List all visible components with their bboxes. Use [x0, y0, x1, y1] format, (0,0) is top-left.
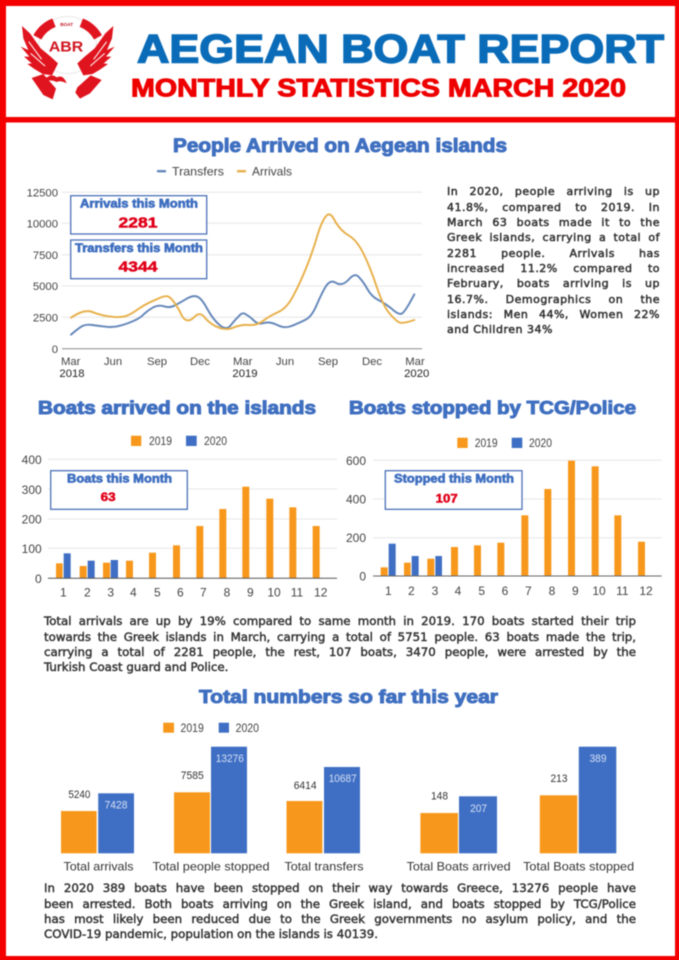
line chart legend: Arrivals [252, 164, 292, 178]
bar chart: boats arrived: 100 [22, 542, 42, 556]
text block: island summary: February, boats arriving is up [447, 277, 660, 290]
text block: boats summary: Turkish Coast guard and Police. [44, 660, 228, 674]
text block: island summary [446, 185, 661, 336]
line chart: transfers and arrivals: Mar [405, 356, 425, 368]
callout: boats this month: 63 [101, 490, 116, 504]
title: AEGEAN BOAT REPORT [137, 28, 664, 72]
bar chart: boats arrived [22, 453, 337, 600]
bar chart: total transfers [284, 767, 364, 874]
bar chart: boats stopped: 3 [432, 584, 439, 598]
bar chart: boats stopped: 8 [549, 584, 556, 598]
text block: island summary: islands: Men 44%, Women 22% [447, 308, 660, 321]
text block: year summary: In 2020 389 boats have been stopped on their way towards Greece, 13276 people have [44, 881, 636, 895]
text block: boats summary [43, 614, 636, 674]
heading: boats stopped: Boats stopped by TCG/Police [349, 398, 636, 418]
bar chart: boats arrived: 0 [35, 572, 42, 586]
bar chart: boats arrived: 1 [60, 586, 67, 600]
bar chart: boats arrived: 4 [130, 586, 137, 600]
line chart legend [157, 164, 292, 178]
bar chart: boats stopped: 12 [639, 584, 653, 598]
line chart: transfers and arrivals: Jun [276, 356, 294, 368]
bar chart: boats arrived: 2 [84, 586, 91, 600]
callout: boats this month [51, 471, 187, 509]
bar chart: total boats arrived [407, 790, 511, 874]
bar chart: boats arrived: 8 [224, 586, 231, 600]
legend: boats arrived: 2020 [204, 434, 227, 448]
bar chart: boats arrived: 400 [22, 453, 42, 467]
legend: boats stopped: 2019 [475, 436, 498, 450]
legend: boats stopped: 2020 [529, 436, 552, 450]
heading: people arrived: People Arrived on Aegean islands [173, 136, 507, 157]
bar chart: total people stopped: 7585 [181, 770, 204, 782]
bar chart: total arrivals: Total arrivals [64, 860, 134, 874]
callout: transfers this month [71, 240, 207, 279]
text block: island summary: 41.8%, compared to 2019. In [447, 201, 660, 214]
text block: boats summary: towards the Greek islands in March, carrying a total of 5751 people. 63 boats made the trip, [44, 630, 636, 644]
bar chart: total boats stopped: Total Boats stopped [523, 860, 634, 874]
bar chart: total boats arrived: 148 [431, 790, 448, 802]
bar chart: boats stopped: 5 [478, 584, 485, 598]
text block: island summary: 16.7%. Demographics on the [447, 293, 660, 306]
bar chart: boats stopped: 4 [455, 584, 462, 598]
bar chart: boats arrived: 12 [314, 586, 328, 600]
text block: boats summary: carrying a total of 2281 people, the rest, 107 boats, 3470 people, were arrested by the [44, 645, 636, 659]
bar chart: boats arrived: 300 [22, 483, 42, 497]
line chart: transfers and arrivals: 12500 [27, 187, 58, 199]
bar chart: total transfers: 10687 [329, 773, 357, 785]
bar chart: boats arrived: 5 [154, 586, 161, 600]
bar chart: boats stopped: 600 [346, 454, 366, 468]
line chart: transfers and arrivals: Dec [362, 356, 382, 368]
legend: boats arrived: 2019 [149, 434, 172, 448]
text block: year summary: been arrested. Both boats arriving on the Greek island, and boats stopped by TCG/Police [44, 897, 636, 911]
bar chart: total boats stopped: 213 [550, 773, 568, 785]
line chart: transfers and arrivals: 2500 [33, 312, 58, 324]
legend: totals: 2020 [236, 721, 259, 735]
legend: totals [163, 721, 259, 735]
bar chart: total boats stopped: 389 [590, 753, 606, 765]
line chart: transfers and arrivals: Sep [147, 356, 167, 368]
subtitle: MONTHLY STATISTICS MARCH 2020 [131, 74, 626, 102]
line chart: transfers and arrivals: 2018 [59, 368, 85, 380]
bar chart: boats arrived: 9 [247, 586, 254, 600]
callout: arrivals this month: Arrivals this Month [80, 198, 198, 210]
bar chart: boats stopped [346, 454, 662, 598]
line chart: transfers and arrivals: 2019 [232, 368, 258, 380]
line chart: transfers and arrivals: 7500 [33, 250, 58, 262]
bar chart: total arrivals: 5240 [68, 789, 90, 801]
bar chart: boats stopped: 0 [359, 570, 366, 584]
callout: transfers this month: Transfers this Month [75, 243, 203, 255]
line chart legend: Transfers [172, 164, 224, 178]
bar chart: boats stopped: 11 [616, 584, 629, 598]
callout: stopped this month: 107 [436, 492, 458, 506]
line chart: transfers and arrivals: Mar [233, 356, 253, 368]
bar chart: total boats stopped [523, 747, 634, 874]
bar chart: boats stopped: 10 [592, 584, 606, 598]
text block: year summary: has most likely been reduced due to the Greek governments no asylum policy, and the [44, 912, 636, 926]
text block: year summary [44, 881, 636, 942]
bar chart: boats stopped: 9 [572, 584, 579, 598]
callout: transfers this month: 4344 [118, 259, 158, 276]
bar chart: total boats arrived: Total Boats arrived [407, 860, 511, 874]
bar chart: boats stopped: 1 [385, 584, 392, 598]
logo: ABR eagle emblem: ABR [49, 39, 83, 56]
logo: ABR eagle emblem [21, 16, 115, 99]
legend: totals: 2019 [180, 721, 204, 735]
bar chart: boats stopped: 6 [502, 584, 509, 598]
text block: year summary: COVID-19 pandemic, population on the islands is 40139. [44, 927, 378, 941]
callout: stopped this month: Stopped this Month [394, 474, 514, 486]
bar chart: boats stopped: 2 [408, 584, 415, 598]
legend: boats arrived [131, 434, 227, 448]
bar chart: boats arrived: 6 [177, 586, 184, 600]
line chart: transfers and arrivals: 5000 [33, 281, 58, 293]
line chart: transfers and arrivals: Mar [61, 356, 81, 368]
callout: arrivals this month [71, 196, 207, 234]
line chart: transfers and arrivals: Dec [190, 356, 210, 368]
bar chart: boats arrived: 200 [22, 512, 42, 526]
bar chart: boats stopped: 7 [525, 584, 532, 598]
bar chart: boats arrived: 10 [267, 586, 281, 600]
heading: boats arrived: Boats arrived on the islands [38, 398, 316, 418]
line chart: transfers and arrivals: Sep [318, 356, 338, 368]
text block: island summary: 2281 people. Arrivals has [447, 247, 660, 260]
line chart: transfers and arrivals: 10000 [27, 218, 58, 230]
callout: arrivals this month: 2281 [118, 215, 158, 232]
callout: boats this month: Boats this Month [67, 474, 172, 486]
callout: stopped this month [385, 471, 522, 509]
line chart: transfers and arrivals: Jun [104, 356, 122, 368]
bar chart: total people stopped: 13276 [216, 753, 244, 765]
text block: island summary: and Children 34% [447, 323, 553, 336]
heading: total numbers: Total numbers so far this year [199, 687, 498, 707]
line chart: transfers and arrivals: 2020 [404, 368, 429, 380]
bar chart: total arrivals: 7428 [104, 800, 128, 812]
bar chart: boats arrived: 7 [200, 586, 207, 600]
logo: ABR eagle emblem: BOAT [60, 22, 73, 27]
bar chart: total boats arrived: 207 [470, 803, 487, 815]
bar chart: total arrivals [61, 789, 134, 874]
bar chart: boats stopped: 400 [346, 492, 366, 506]
line chart: transfers and arrivals: 0 [52, 344, 58, 356]
text block: island summary: In 2020, people arriving is up [447, 185, 660, 198]
text block: island summary: increased 11.2% compared to [447, 262, 660, 275]
text block: island summary: Greek islands, carrying a total of [447, 231, 660, 244]
bar chart: total people stopped [152, 747, 270, 874]
bar chart: boats stopped: 200 [346, 531, 366, 545]
bar chart: total people stopped: Total people stopped [152, 860, 270, 874]
bar chart: total transfers: Total transfers [284, 860, 364, 874]
bar chart: total transfers: 6414 [294, 780, 317, 792]
legend: boats stopped [457, 436, 552, 450]
text block: boats summary: Total arrivals are up by 19% compared to same month in 2019. 170 boats started their trip [44, 614, 636, 628]
bar chart: boats arrived: 3 [107, 586, 114, 600]
text block: island summary: March 63 boats made it to the [447, 216, 660, 229]
bar chart: boats arrived: 11 [291, 586, 304, 600]
line chart: transfers and arrivals [27, 187, 429, 380]
